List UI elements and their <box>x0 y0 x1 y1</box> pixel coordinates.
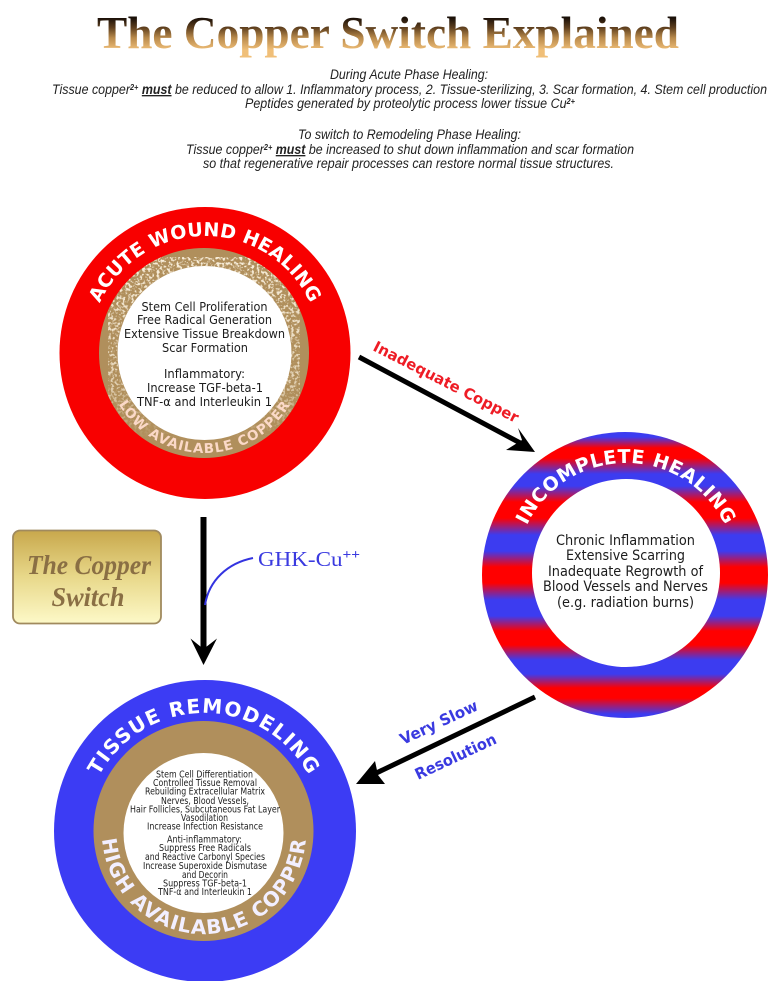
intro text: remodeling phase: 2+ <box>263 143 273 152</box>
label: inadequate copper: Inadequate Copper <box>370 338 522 427</box>
acute text: Extensive Tissue Breakdown <box>124 326 285 341</box>
remodeling text: Hair Follicles, Subcutaneous Fat Layer <box>130 804 281 816</box>
white centre <box>118 266 292 440</box>
arrow: acute to incomplete <box>359 357 535 452</box>
icon: the copper switch badge <box>13 530 161 624</box>
intro text: acute phase: Peptides generated by proteolytic process lower tissue Cu <box>245 96 592 111</box>
ring sublabel: HIGH AVAILABLE COPPER <box>102 838 306 934</box>
label: GHK-Cu: GHK-Cu <box>258 547 335 571</box>
intro text: acute phase: During Acute Phase Healing: <box>330 67 488 82</box>
white centre <box>124 753 284 913</box>
copper ring <box>94 721 314 941</box>
incomplete text <box>543 533 708 611</box>
ring sublabel: LOW AVAILABLE COPPER <box>119 400 290 453</box>
icon: the copper switch badge: Switch <box>52 582 124 612</box>
ring heading: INCOMPLETE HEALING <box>515 449 736 524</box>
remodeling text <box>130 770 281 898</box>
acute text: Free Radical Generation <box>137 312 272 327</box>
incomplete text: Extensive Scarring <box>566 548 685 564</box>
ring heading: ACUTE WOUND HEALING <box>90 222 321 304</box>
ring heading: TISSUE REMODELING <box>86 698 320 774</box>
incomplete text: Blood Vessels and Nerves <box>543 579 708 595</box>
acute text <box>124 299 285 409</box>
label: GHK-Cu: ++ <box>342 548 360 563</box>
copper ring <box>99 248 309 458</box>
blue outer ring <box>54 680 356 981</box>
panel: acute wound healing <box>60 207 350 499</box>
label: resolution: Resolution <box>412 730 499 784</box>
remodeling text: Increase Infection Resistance <box>147 822 263 832</box>
striped ring <box>482 432 768 718</box>
remodeling text: Nerves, Blood Vessels, <box>161 796 249 807</box>
arrow: acute to remodeling <box>190 517 217 665</box>
panel: tissue remodeling <box>54 680 356 981</box>
red outer ring <box>60 207 350 499</box>
remodeling text: Stem Cell Differentiation <box>156 770 253 780</box>
intro text: remodeling phase <box>186 127 634 171</box>
acute text: Inflammatory: <box>164 366 245 381</box>
acute text: Stem Cell Proliferation <box>142 299 268 314</box>
intro text: remodeling phase: Tissue copper <box>186 142 271 157</box>
intro text: acute phase: Tissue copper <box>52 82 137 97</box>
remodeling text: Vasodilation <box>181 813 228 824</box>
title: The Copper Switch Explained <box>97 8 679 58</box>
intro text: remodeling phase: must be increased to shut down inflammation and scar formation <box>276 142 663 157</box>
remodeling text: Suppress Free Radicals <box>159 843 251 854</box>
acute text: Increase TGF-beta-1 <box>147 380 263 395</box>
remodeling text: and Reactive Carbonyl Species <box>145 852 265 863</box>
white centre <box>532 479 720 667</box>
intro text: acute phase <box>52 67 767 111</box>
panel: incomplete healing <box>482 432 768 718</box>
intro text: remodeling phase: so that regenerative repair processes can restore normal tissue structures. <box>203 156 614 171</box>
intro text: acute phase: 2+ <box>129 83 139 92</box>
remodeling text: Rebuilding Extracellular Matrix <box>145 786 265 798</box>
remodeling text: Suppress TGF-beta-1 <box>163 878 247 890</box>
remodeling text: Controlled Tissue Removal <box>153 778 257 789</box>
connector: GHK-Cu curve <box>205 558 253 605</box>
remodeling text: Increase Superoxide Dismutase <box>143 861 267 872</box>
incomplete text: Inadequate Regrowth of <box>548 564 704 580</box>
icon: the copper switch badge: The Copper <box>27 550 151 580</box>
incomplete text: Chronic Inflammation <box>556 533 695 549</box>
intro text: acute phase: 2+ <box>566 97 575 106</box>
remodeling text: Anti-inflammatory: <box>167 834 242 846</box>
acute text: Scar Formation <box>162 340 248 355</box>
remodeling text: TNF-α and Interleukin 1 <box>157 887 252 898</box>
acute text: TNF-α and Interleukin 1 <box>136 394 272 409</box>
arrow: incomplete to remodeling <box>356 697 535 784</box>
intro text: remodeling phase: To switch to Remodeling Phase Healing: <box>298 127 521 142</box>
label: very slow: Very Slow <box>397 697 481 749</box>
incomplete text: (e.g. radiation burns) <box>557 595 694 611</box>
remodeling text: and Decorin <box>182 870 228 881</box>
